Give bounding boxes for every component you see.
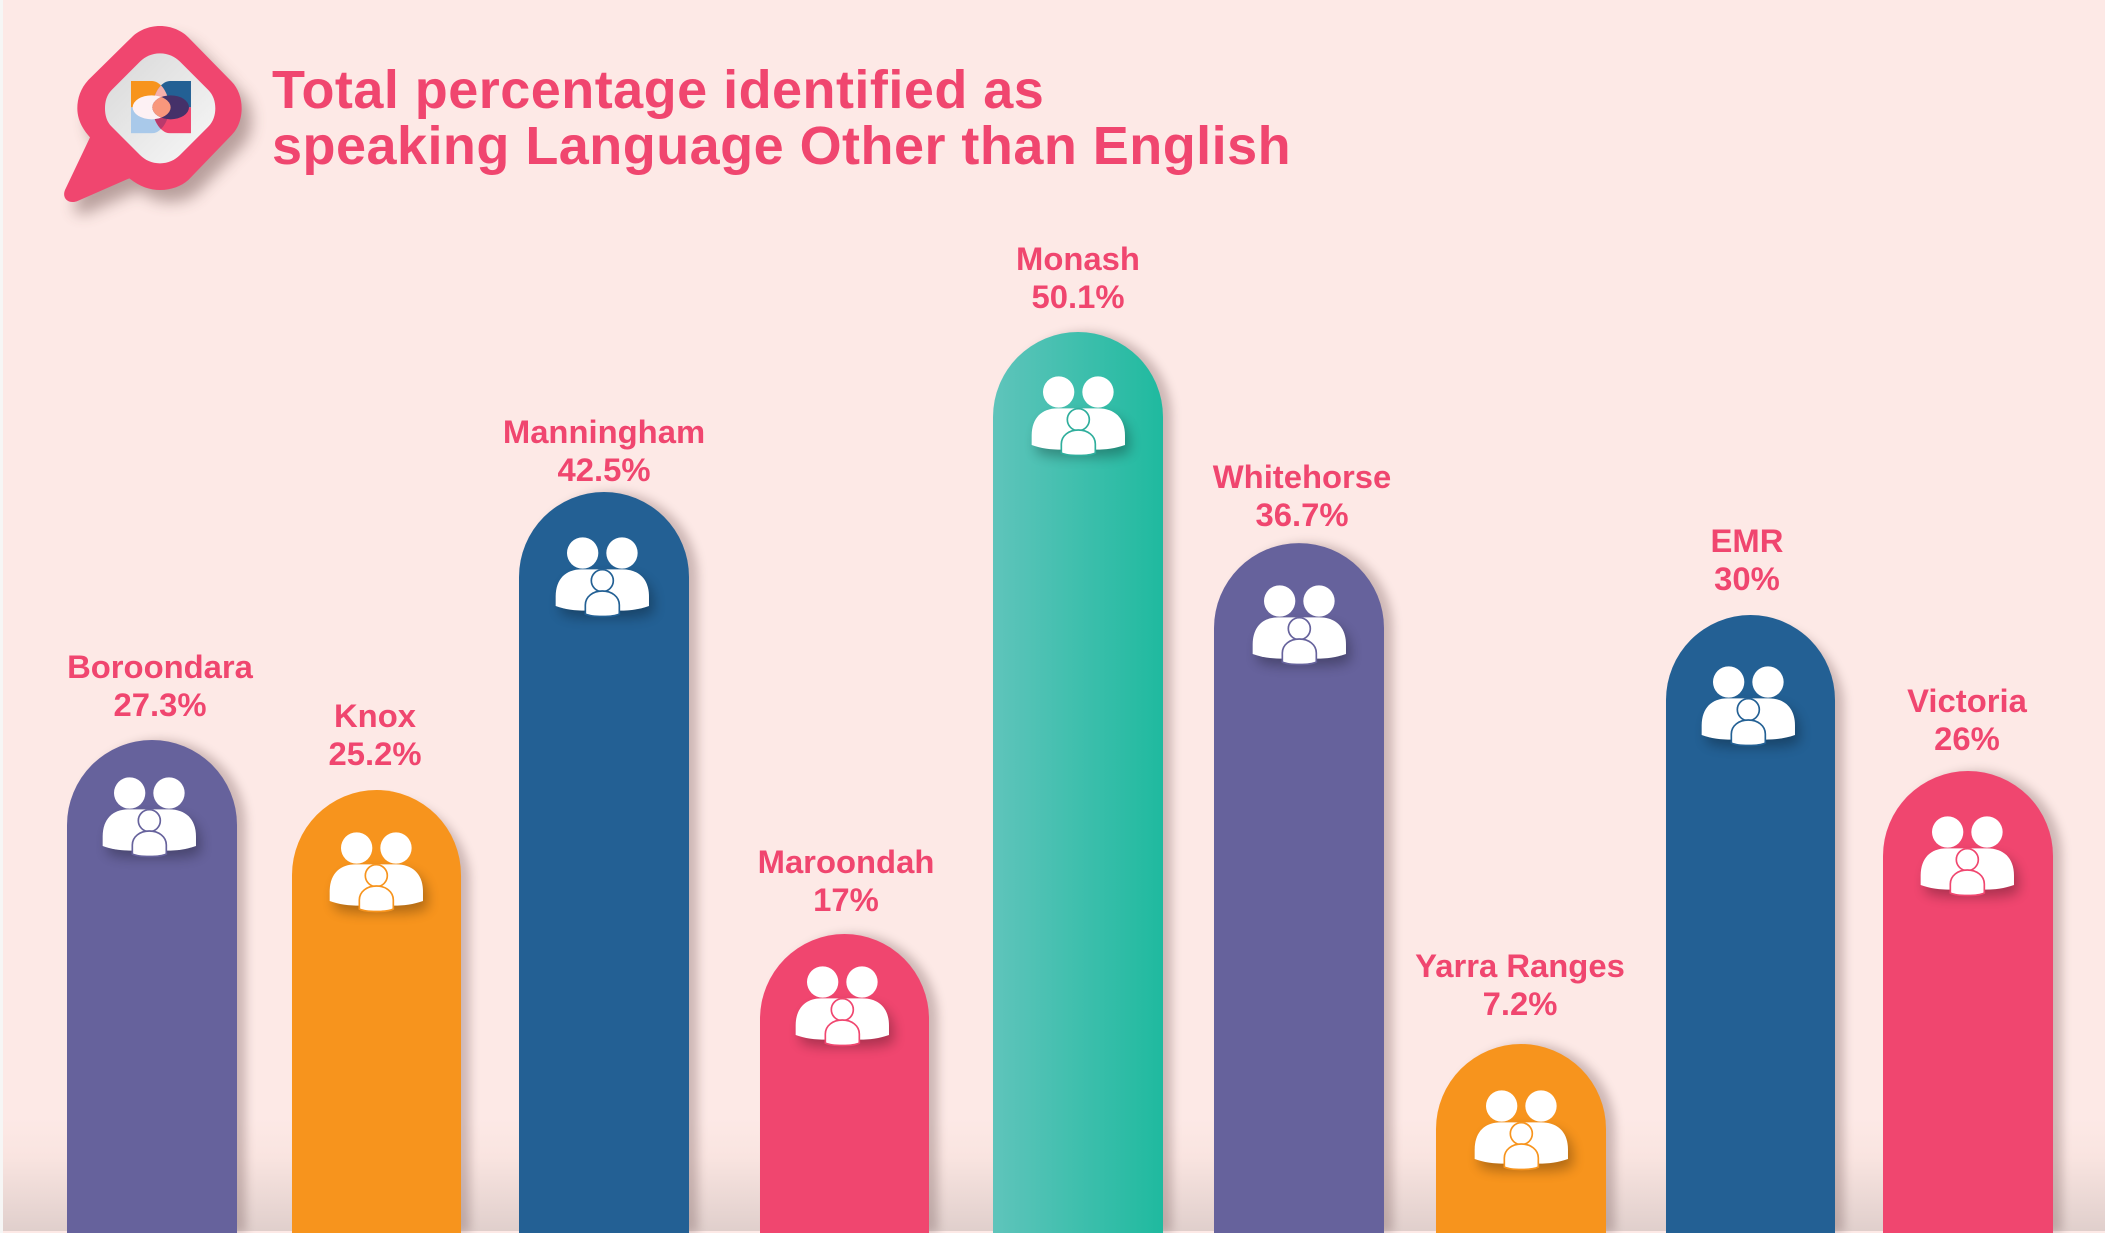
label: Monash 50.1%: Monash xyxy=(1016,240,1140,277)
bar: Boroondara xyxy=(67,740,246,1233)
label: Knox 25.2%: 25.2% xyxy=(328,735,422,772)
label: Maroondah 17%: Maroondah xyxy=(758,843,934,880)
bar: Maroondah xyxy=(760,934,938,1233)
label: Manningham 42.5%: Manningham xyxy=(503,413,705,450)
bar: Victoria xyxy=(1883,771,2062,1233)
title: Total percentage identified as xyxy=(272,60,1044,120)
label: Victoria 26%: Victoria xyxy=(1907,682,2028,719)
label: Whitehorse 36.7%: Whitehorse xyxy=(1213,458,1391,495)
label: Maroondah 17%: 17% xyxy=(813,881,879,918)
label: Whitehorse 36.7%: 36.7% xyxy=(1256,496,1348,533)
bar: Knox xyxy=(292,790,470,1233)
label: EMR 30%: 30% xyxy=(1714,560,1780,597)
bar: Monash xyxy=(993,332,1172,1233)
bar: Manningham xyxy=(519,492,698,1233)
label: Boroondara 27.3%: Boroondara xyxy=(67,648,254,685)
title: speaking Language Other than English xyxy=(272,116,1291,176)
label: Monash 50.1%: 50.1% xyxy=(1032,278,1124,315)
label: Victoria 26%: 26% xyxy=(1934,720,2000,757)
bar: EMR xyxy=(1666,615,1844,1233)
label: Manningham 42.5%: 42.5% xyxy=(558,451,650,488)
label: Yarra Ranges 7.2%: Yarra Ranges xyxy=(1415,947,1625,984)
bar: Whitehorse xyxy=(1214,543,1393,1233)
label: Boroondara 27.3%: 27.3% xyxy=(114,686,206,723)
icon: speech bubble logo xyxy=(64,26,252,214)
label: EMR 30%: EMR xyxy=(1711,522,1784,559)
label: Knox 25.2%: Knox xyxy=(334,697,416,734)
label: Yarra Ranges 7.2%: 7.2% xyxy=(1483,985,1557,1022)
bar: Yarra Ranges xyxy=(1436,1044,1615,1233)
